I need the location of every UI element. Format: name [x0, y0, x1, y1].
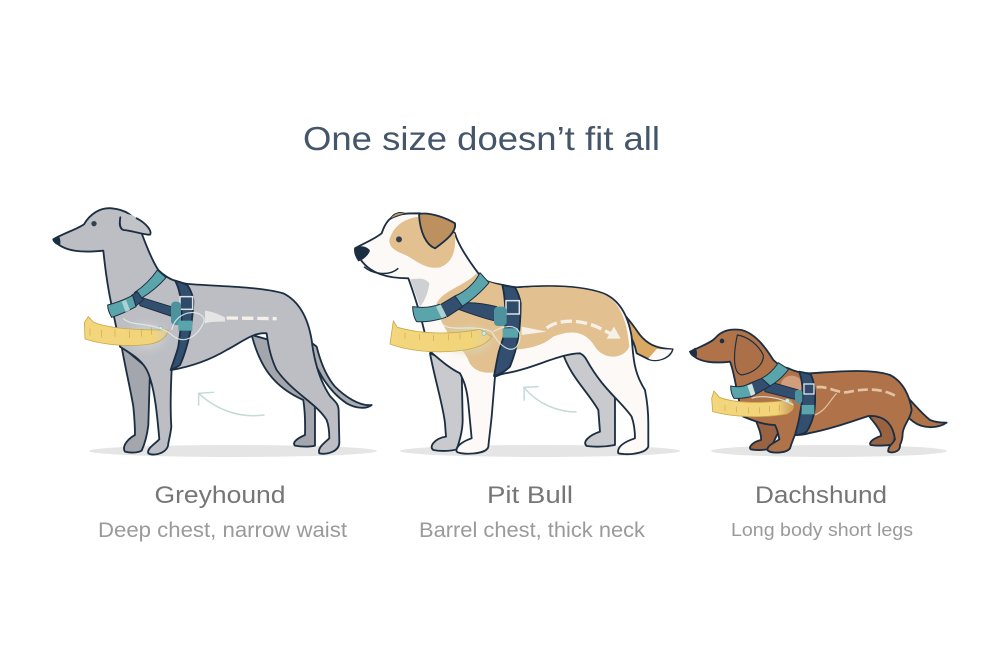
spine arrow: [205, 311, 277, 323]
label: dachshund: [731, 482, 913, 540]
spine arrow: [815, 387, 897, 415]
ear: [419, 214, 455, 248]
eye: [720, 339, 724, 343]
breed name: Dachshund: [755, 482, 887, 509]
eye: [91, 221, 97, 226]
tan patches: [389, 217, 629, 373]
dog: pit bull: [354, 213, 673, 454]
body: [690, 329, 912, 453]
spine arrow: [522, 321, 621, 339]
dog: dachshund: [689, 329, 947, 453]
chest glow: [781, 376, 802, 394]
tail tip: [648, 349, 672, 360]
chest glow: [445, 327, 492, 353]
breed name: Pit Bull: [487, 482, 573, 509]
label: pit bull: [419, 482, 646, 542]
harness: [731, 363, 815, 435]
tape measure: [84, 317, 168, 346]
ear: [735, 335, 763, 375]
tape measure: [390, 321, 492, 352]
ground shadow: greyhound: [89, 445, 377, 457]
nose: [689, 348, 697, 357]
title: One size doesn’t fit all: [303, 120, 660, 157]
tail: [893, 388, 947, 427]
tail: [303, 337, 372, 408]
glow loop: [752, 397, 793, 405]
dog: greyhound: [52, 208, 372, 455]
mouth: [364, 267, 398, 274]
body: [355, 213, 648, 454]
label: greyhound: [98, 482, 347, 542]
description: Long body short legs: [731, 520, 913, 540]
body: [53, 208, 339, 455]
ground shadow: pit bull: [400, 445, 680, 457]
nose: [52, 235, 60, 245]
chest glow: [128, 323, 165, 350]
breed name: Greyhound: [154, 482, 286, 509]
tape measure: [712, 391, 793, 417]
eye: [396, 236, 402, 242]
far legs: [430, 350, 615, 451]
harness: [108, 270, 193, 370]
ear: [120, 213, 151, 235]
nose: [354, 246, 370, 261]
description: Barrel chest, thick neck: [419, 519, 646, 542]
curved arrow: [199, 392, 264, 416]
harness: [413, 273, 521, 376]
far legs: [122, 335, 315, 453]
glow loop: [442, 323, 520, 349]
glow loop: [123, 313, 204, 340]
ground shadow: dachshund: [711, 445, 947, 457]
curved arrow: [524, 387, 576, 412]
far legs: [750, 413, 898, 450]
description: Deep chest, narrow waist: [98, 519, 347, 542]
tail: [607, 305, 673, 360]
ear back tip: [390, 213, 406, 219]
